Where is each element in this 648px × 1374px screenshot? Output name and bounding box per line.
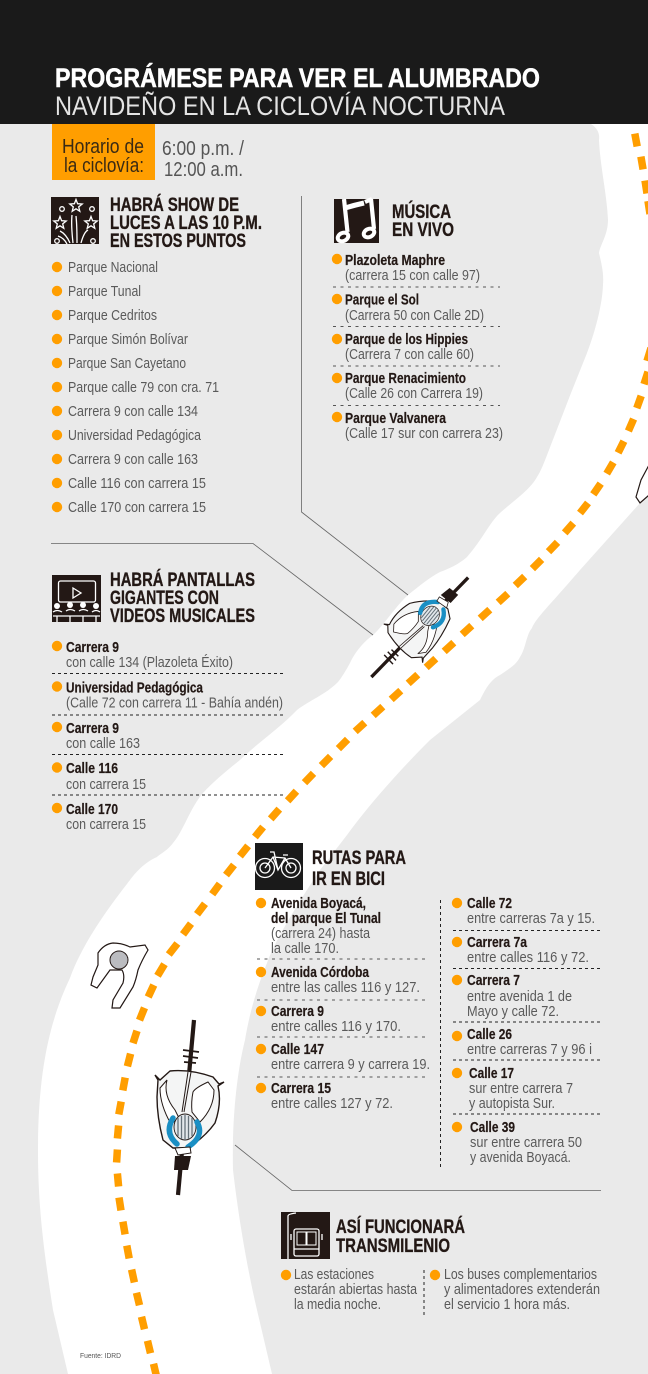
text: stations: estarán abiertas hasta <box>294 1282 418 1298</box>
list: routes left column: Carrera 15 <box>271 1081 331 1097</box>
text: feeder buses <box>430 1267 600 1313</box>
list: routes left column: (carrera 24) hasta <box>271 926 371 942</box>
list: light show points: Calle 170 con carrera 15 <box>68 500 206 516</box>
list: routes right column: Mayo y calle 72. <box>467 1004 559 1020</box>
heading: bike routes <box>312 848 406 890</box>
list: light show points <box>52 260 219 516</box>
panel: TransMilenio <box>281 1212 600 1316</box>
list: routes left column: Avenida Córdoba <box>271 965 370 981</box>
list: screen locations: Calle 116 <box>66 761 118 777</box>
list: routes right column: Calle 39 <box>470 1120 515 1136</box>
list: routes right column: entre carreras 7a y 15. <box>467 911 595 927</box>
list: screen locations: con carrera 15 <box>66 777 146 793</box>
list: screen locations: Carrera 9 <box>66 721 119 737</box>
list: routes right column: y avenida Boyacá. <box>470 1150 571 1166</box>
title <box>55 62 540 121</box>
list: routes left column: Calle 147 <box>271 1042 324 1058</box>
list: screen locations: (Calle 72 con carrera 11 - Bahía andén) <box>66 696 283 712</box>
list: music venues: (carrera 15 con calle 97) <box>345 268 480 284</box>
illustration: cyclist on road (upper) <box>353 555 482 696</box>
list: routes right column: entre carreras 7 y 96 i <box>467 1042 592 1058</box>
heading: light show: HABRÁ SHOW DE <box>110 194 239 216</box>
leader lines <box>51 196 601 1190</box>
list: routes left column <box>256 896 430 1112</box>
list: screen locations: Carrera 9 <box>66 640 119 656</box>
schedule box: la ciclovía: <box>64 155 144 177</box>
list: music venues: (Carrera 50 con Calle 2D) <box>345 308 484 324</box>
text: stations <box>281 1267 418 1313</box>
icon: cinema screen <box>52 575 101 622</box>
list: screen locations: Calle 170 <box>66 802 118 818</box>
list: light show points: Parque calle 79 con cra. 71 <box>68 380 219 396</box>
heading: TransMilenio: TRANSMILENIO <box>336 1236 450 1257</box>
list: routes right column: Carrera 7a <box>467 935 528 951</box>
list: light show points: Carrera 9 con calle 134 <box>68 404 198 420</box>
list: routes right column: sur entre carrera 50 <box>470 1135 582 1151</box>
list: routes left column: entre carrera 9 y carrera 19. <box>271 1057 430 1073</box>
header band <box>0 0 648 124</box>
list: screen locations: con calle 134 (Plazoleta Éxito) <box>66 654 233 671</box>
road centre dashed line <box>117 134 648 1374</box>
heading: light show <box>110 194 262 252</box>
schedule hours <box>162 138 244 181</box>
list: music venues: Plazoleta Maphre <box>345 253 445 269</box>
heading: giant screens: HABRÁ PANTALLAS <box>110 569 255 591</box>
list: music venues: Parque Renacimiento <box>345 371 466 387</box>
icon: music notes <box>334 199 379 243</box>
list: screen locations: con calle 163 <box>66 736 140 752</box>
column divider <box>440 900 442 1167</box>
list: routes left column: Carrera 9 <box>271 1004 324 1020</box>
list: screen locations <box>52 640 283 833</box>
list: routes right column: Calle 26 <box>467 1027 512 1043</box>
list: routes right column: Calle 17 <box>469 1066 514 1082</box>
list: routes right column: Carrera 7 <box>467 973 520 989</box>
heading: live music: EN VIVO <box>392 220 454 241</box>
text: feeder buses: Los buses complementarios <box>444 1267 597 1283</box>
schedule box: Horario de <box>62 136 144 158</box>
list: light show points: Universidad Pedagógica <box>68 428 202 444</box>
panel: live music <box>332 199 503 442</box>
panel: bike routes <box>255 843 600 1167</box>
source note: Fuente: IDRD <box>80 1351 122 1360</box>
list: light show points: Parque Simón Bolívar <box>68 332 188 348</box>
panel: light show <box>51 194 262 516</box>
illustration: pedestrian (left) <box>91 943 148 1008</box>
icon: bus <box>281 1212 330 1259</box>
list: routes right column: Calle 72 <box>467 896 512 912</box>
panel: giant screens <box>52 569 283 833</box>
text: feeder buses: y alimentadores extenderán <box>444 1282 600 1298</box>
schedule hours: 12:00 a.m. <box>164 159 243 181</box>
divider <box>423 1270 425 1316</box>
list: screen locations: Universidad Pedagógica <box>66 680 204 696</box>
schedule box <box>52 124 155 180</box>
list: music venues: Parque el Sol <box>345 292 419 308</box>
title: PROGRÁMESE PARA VER EL ALUMBRADO <box>55 62 540 93</box>
heading: light show: EN ESTOS PUNTOS <box>110 231 246 252</box>
list: routes left column: entre las calles 116 y 127. <box>271 980 420 996</box>
list: light show points: Parque Nacional <box>68 260 158 276</box>
heading: bike routes: RUTAS PARA <box>312 848 406 869</box>
heading: live music <box>392 201 454 241</box>
title: NAVIDEÑO EN LA CICLOVÍA NOCTURNA <box>55 90 505 121</box>
list: light show points: Calle 116 con carrera 15 <box>68 476 206 492</box>
illustration: cyclist on road (lower) <box>155 1020 224 1195</box>
heading: giant screens: GIGANTES CON <box>110 588 219 609</box>
list: routes left column: del parque El Tunal <box>271 911 381 927</box>
heading: giant screens <box>110 569 255 627</box>
schedule hours: 6:00 p.m. / <box>162 138 244 160</box>
list: music venues: (Calle 17 sur con carrera 23) <box>345 426 503 442</box>
list: light show points: Parque Tunal <box>68 284 141 300</box>
icon: fireworks <box>51 197 99 244</box>
heading: live music: MÚSICA <box>392 201 451 223</box>
list: light show points: Parque San Cayetano <box>68 356 186 372</box>
list: routes right column: sur entre carrera 7 <box>469 1081 573 1097</box>
list: music venues: Parque de los Hippies <box>345 332 468 348</box>
list: light show points: Parque Cedritos <box>68 308 157 324</box>
list: routes right column: y autopista Sur. <box>469 1096 555 1112</box>
list: light show points: Carrera 9 con calle 163 <box>68 452 198 468</box>
text: feeder buses: el servicio 1 hora más. <box>444 1297 570 1313</box>
heading: light show: LUCES A LAS 10 P.M. <box>110 213 262 234</box>
text: stations: la media noche. <box>294 1297 381 1313</box>
list: music venues: (Calle 26 con Carrera 19) <box>345 386 483 402</box>
list: routes right column: entre avenida 1 de <box>467 989 572 1005</box>
heading: bike routes: IR EN BICI <box>312 869 385 890</box>
list: music venues: Parque Valvanera <box>345 411 447 427</box>
list: music venues <box>332 253 503 442</box>
text: stations: Las estaciones <box>294 1267 374 1283</box>
heading: giant screens: VIDEOS MUSICALES <box>110 606 255 627</box>
illustration: pedestrian cut off at right edge <box>636 465 648 503</box>
list: routes left column: la calle 170. <box>271 941 339 957</box>
list: music venues: (Carrera 7 con calle 60) <box>345 347 474 363</box>
heading: TransMilenio <box>336 1216 465 1257</box>
list: routes left column: entre calles 127 y 72. <box>271 1096 393 1112</box>
list: screen locations: con carrera 15 <box>66 817 146 833</box>
list: routes right column: entre calles 116 y 72. <box>467 950 589 966</box>
list: routes right column <box>452 896 600 1166</box>
list: routes left column: Avenida Boyacá, <box>271 896 366 912</box>
list: routes left column: entre calles 116 y 170. <box>271 1019 401 1035</box>
heading: TransMilenio: ASÍ FUNCIONARÁ <box>336 1216 465 1238</box>
icon: bicycle <box>255 843 303 890</box>
